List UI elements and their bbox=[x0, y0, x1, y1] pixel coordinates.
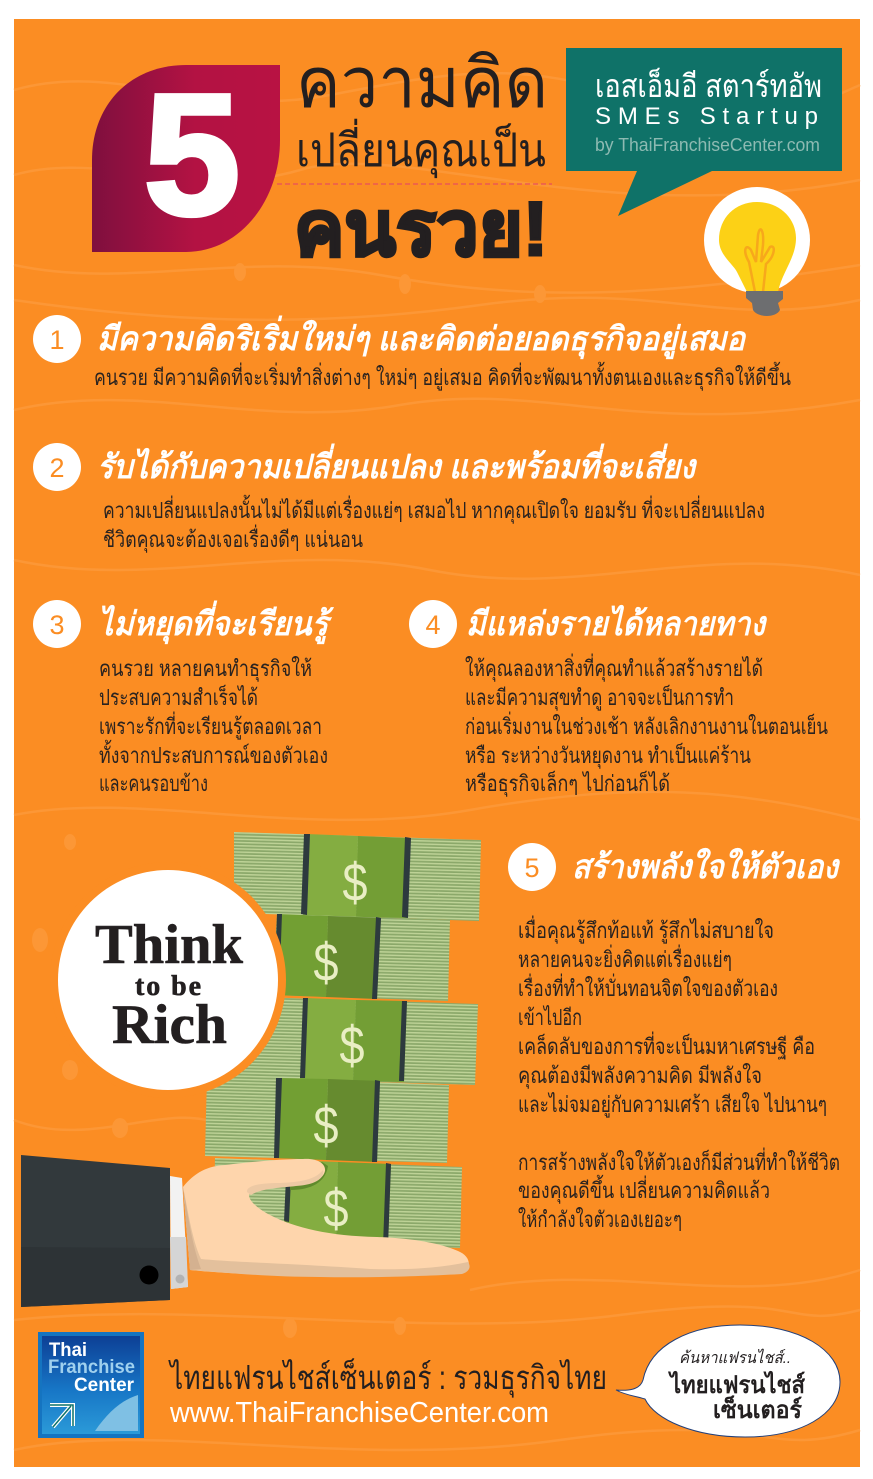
icon: number 2 bbox=[33, 443, 81, 491]
body 5: เมื่อคุณรู้สึกท้อแท้ รู้สึกไม่สบายใจ bbox=[518, 915, 774, 944]
body 4: และมีความสุขทำดู อาจจะเป็นการทำ bbox=[465, 683, 734, 711]
body 5: ของคุณดีขึ้น เปลี่ยนความคิดแล้ว bbox=[518, 1175, 770, 1204]
cuff bbox=[170, 1176, 188, 1289]
body 4 bbox=[465, 653, 828, 797]
body 4: หรือธุรกิจเล็กๆ ไปก่อนก็ได้ bbox=[465, 769, 670, 797]
body 2 bbox=[103, 495, 765, 553]
speech bubble: search franchise: ไทยแฟรนไชส์ bbox=[667, 1370, 805, 1399]
speech bubble: SMEs Startup: เอสเอ็มอี สตาร์ทอัพ bbox=[595, 67, 822, 104]
bundle 2 bbox=[272, 914, 450, 1001]
footer logo: Thai Franchise Center bbox=[38, 1332, 144, 1438]
bundle 1: $ bbox=[342, 853, 368, 913]
icon: number 4 bbox=[409, 600, 457, 648]
section 2 bbox=[33, 443, 765, 553]
body 4: หรือ ระหว่างวันหยุดงาน ทำเป็นแค่ร้าน bbox=[465, 741, 751, 769]
bundle 1 bbox=[234, 832, 481, 921]
body 3: ทั้งจากประสบการณ์ของตัวเอง bbox=[99, 740, 328, 768]
footer logo: Thai Franchise Center: Thai bbox=[49, 1340, 87, 1361]
speech bubble: search franchise: เซ็นเตอร์ bbox=[713, 1395, 802, 1424]
title: ความคิด bbox=[296, 44, 548, 122]
body 5: เรื่องที่ทำให้บั่นทอนจิตใจของตัวเอง bbox=[518, 973, 778, 1001]
speech bubble: SMEs Startup bbox=[566, 48, 842, 216]
icon: number 3 bbox=[33, 600, 81, 648]
bundle 5 bbox=[213, 1158, 462, 1248]
bundle 3: $ bbox=[340, 1016, 364, 1076]
bundle 2: $ bbox=[314, 933, 338, 993]
icon: number 3: 3 bbox=[49, 610, 65, 640]
heading 1: มีความคิดริเริ่มใหม่ๆ และคิดต่อยอดธุรกิจอยู่เสมอ bbox=[97, 315, 747, 360]
icon: number 5 bbox=[508, 843, 556, 891]
speech bubble: SMEs Startup: SMEs Startup bbox=[595, 103, 818, 130]
logo badge: number 5 bbox=[92, 59, 280, 252]
sleeve bbox=[21, 1155, 170, 1307]
body 3: คนรวย หลายคนทำธุรกิจให้ bbox=[99, 656, 312, 682]
section 1 bbox=[33, 315, 791, 391]
section 3 bbox=[33, 600, 334, 796]
body 5 bbox=[518, 915, 840, 1232]
illustration: stacked money on hand bbox=[21, 832, 481, 1307]
heading 5: สร้างพลังใจให้ตัวเอง bbox=[572, 847, 841, 885]
badge: Think to be Rich bbox=[50, 862, 286, 1098]
body 5: หลายคนจะยิ่งคิดแต่เรื่องแย่ๆ bbox=[518, 944, 732, 972]
title: เปลี่ยนคุณเป็น bbox=[296, 118, 546, 179]
bundle 3 bbox=[222, 996, 478, 1085]
body 3 bbox=[99, 656, 328, 796]
icon: number 2: 2 bbox=[49, 453, 65, 483]
body 5: คุณต้องมีพลังความคิด มีพลังใจ bbox=[518, 1063, 762, 1089]
speech bubble: search franchise: ค้นหาแฟรนไชส์.. bbox=[679, 1348, 791, 1367]
logo badge: number 5: 5 bbox=[144, 59, 240, 251]
icon: number 1 bbox=[33, 315, 81, 363]
badge: Think to be Rich: to be bbox=[135, 971, 201, 1002]
body 3: เพราะรักที่จะเรียนรู้ตลอดเวลา bbox=[99, 711, 322, 740]
section 5 bbox=[508, 843, 841, 1232]
badge: Think to be Rich: Think bbox=[95, 914, 244, 976]
footer heading: ไทยแฟรนไชส์เซ็นเตอร์ : รวมธุรกิจไทย bbox=[168, 1358, 607, 1398]
title: คนรวย! bbox=[294, 187, 548, 272]
hand bbox=[183, 1159, 470, 1277]
bundle 4: $ bbox=[314, 1096, 338, 1156]
body 5: เคล็ดลับของการที่จะเป็นมหาเศรษฐี คือ bbox=[518, 1031, 815, 1060]
section 4 bbox=[409, 600, 828, 797]
icon: number 4: 4 bbox=[425, 610, 441, 640]
heading 3: ไม่หยุดที่จะเรียนรู้ bbox=[98, 600, 334, 645]
heading 2: รับได้กับความเปลี่ยนแปลง และพร้อมที่จะเสี่ยง bbox=[97, 443, 698, 485]
icon: number 5: 5 bbox=[524, 853, 540, 883]
footer logo: Thai Franchise Center: Center bbox=[74, 1375, 135, 1396]
heading 4: มีแหล่งรายได้หลายทาง bbox=[466, 604, 768, 642]
badge: Think to be Rich: Rich bbox=[112, 994, 227, 1056]
title bbox=[277, 44, 552, 272]
body 4: ให้คุณลองหาสิ่งที่คุณทำแล้วสร้างรายได้ bbox=[465, 653, 763, 682]
body 5: เข้าไปอีก bbox=[518, 1005, 582, 1030]
bundle 5: $ bbox=[324, 1179, 348, 1239]
body 3: และคนรอบข้าง bbox=[99, 771, 208, 796]
icon: light bulb bbox=[704, 187, 810, 316]
icon: number 1: 1 bbox=[49, 325, 65, 355]
body 5: ให้กำลังใจตัวเองเยอะๆ bbox=[518, 1207, 682, 1232]
body 3: ประสบความสำเร็จได้ bbox=[99, 683, 258, 710]
body 2: ชีวิตคุณจะต้องเจอเรื่องดีๆ แน่นอน bbox=[103, 524, 363, 553]
speech bubble: search franchise bbox=[616, 1325, 840, 1437]
bundle 4 bbox=[205, 1075, 449, 1163]
footer url: www.ThaiFranchiseCenter.com bbox=[169, 1397, 549, 1429]
footer logo: Thai Franchise Center: Franchise bbox=[48, 1357, 135, 1378]
speech bubble: SMEs Startup: by ThaiFranchiseCenter.com bbox=[595, 135, 820, 155]
